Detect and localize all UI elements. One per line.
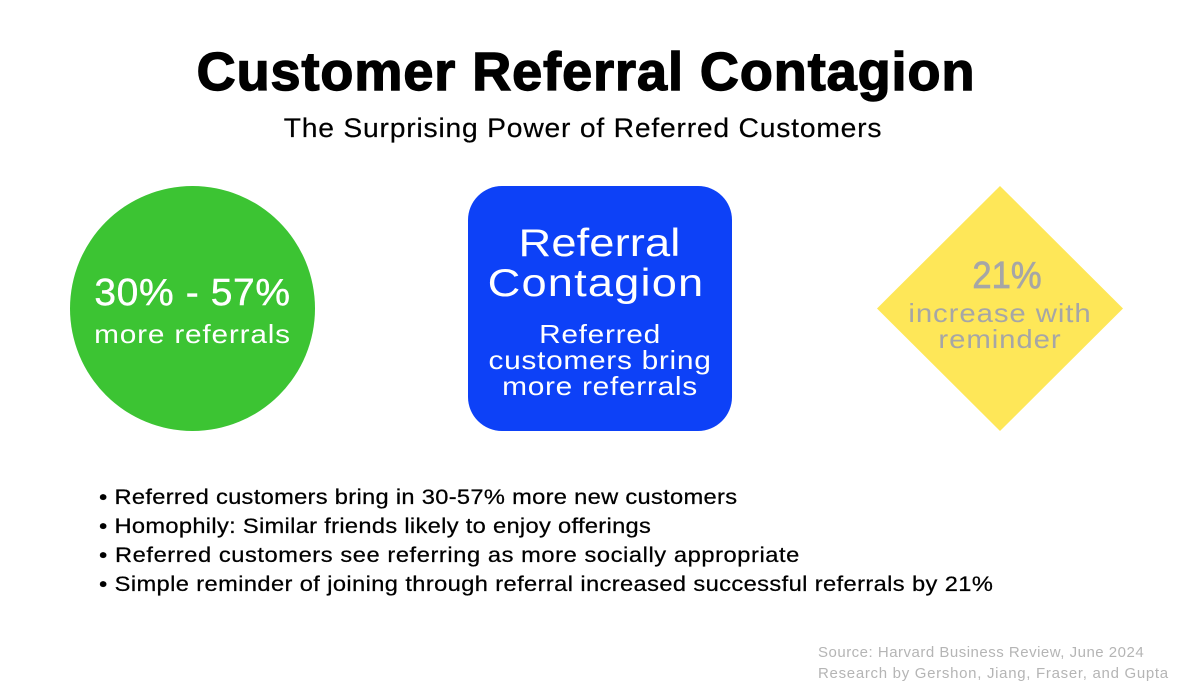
diamond shape <box>877 186 1123 431</box>
source note <box>818 644 1169 682</box>
panel: green circle statistic <box>70 186 315 431</box>
bullet 4: • Simple reminder of joining through referral increased successful referrals by 21% <box>99 572 993 596</box>
heading: Referral Contagion: Referral <box>519 222 680 265</box>
bullet 2: • Homophily: Similar friends likely to enjoy offerings <box>99 514 651 538</box>
panel: blue rounded square <box>468 186 732 431</box>
statistic: 30% - 57%: 30% - 57% <box>94 272 291 314</box>
label: increase with reminder: increase with <box>908 298 1092 328</box>
heading: Referral Contagion <box>488 222 704 305</box>
bullet 3: • Referred customers see referring as more socially appropriate <box>99 543 800 567</box>
panel: yellow diamond statistic <box>877 186 1123 431</box>
description: Referred <box>539 319 661 349</box>
bullet 1: • Referred customers bring in 30-57% more new customers <box>99 485 737 509</box>
statistic: 21%: 21% <box>972 255 1042 297</box>
source note: Research by Gershon, Jiang, Fraser, and Gupta <box>818 665 1169 682</box>
description: customers bring <box>488 345 712 375</box>
bullet list <box>99 485 993 596</box>
description <box>488 319 712 401</box>
label: increase with reminder: reminder <box>938 324 1062 354</box>
source note: Source: Harvard Business Review, June 2024 <box>818 644 1144 661</box>
label: increase with reminder <box>908 298 1092 354</box>
heading: Referral Contagion: Contagion <box>488 262 704 305</box>
title: Customer Referral Contagion <box>197 42 975 102</box>
description: more referrals <box>502 371 698 401</box>
subtitle: The Surprising Power of Referred Customers <box>284 113 882 143</box>
label: more referrals: more referrals <box>94 319 291 349</box>
